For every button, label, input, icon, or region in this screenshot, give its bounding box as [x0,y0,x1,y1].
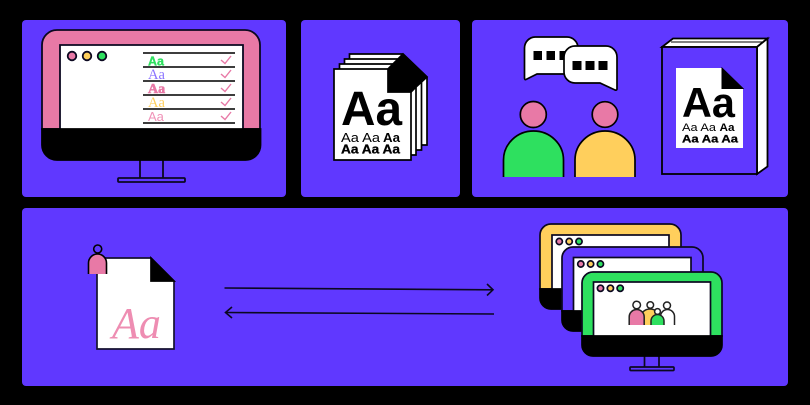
font list with check marks: Aa [148,54,165,68]
arrow: to the left [226,307,494,318]
icon: person green [504,102,564,177]
icon: style guide book: Aa Aa [682,122,717,134]
icon: speech bubble left [524,37,578,80]
icon: blue monitor [562,247,703,331]
icon: italic font document [97,258,174,349]
font list with check marks: Aa [148,95,165,111]
panel: font licensing exchange [22,208,788,386]
panel: font comparison on monitor [22,20,286,197]
icon: small person on document [88,245,106,274]
icon: stacked documents: Aa [383,131,401,145]
icon: italic font document: Aa [109,299,161,348]
icon: green monitor with people [582,272,722,370]
icon: speech bubble right [564,46,617,90]
icon: monitor [42,30,260,182]
icon: style guide book [662,38,768,174]
panel: people discussing and style book [472,20,788,197]
arrow: to the right [224,284,493,296]
icon: stacked documents: Aa Aa [341,131,380,145]
icon: style guide book: Aa [720,122,735,134]
font list with check marks: Aa [148,109,165,124]
font list with check marks: Aa [148,82,165,97]
icon: style guide book: Aa Aa Aa [682,134,739,146]
icon: stacked documents: Aa Aa Aa [341,142,401,156]
icon: style guide book: Aa [682,79,736,126]
font list with check marks: Aa [148,67,165,83]
icon: stacked documents: Aa [341,83,402,136]
audience group [629,301,674,325]
icon: yellow monitor [540,224,681,309]
panel: stack of font documents [301,20,460,197]
icon: person yellow [575,102,635,177]
font list with check marks [143,53,235,124]
icon: stacked documents [334,54,427,160]
